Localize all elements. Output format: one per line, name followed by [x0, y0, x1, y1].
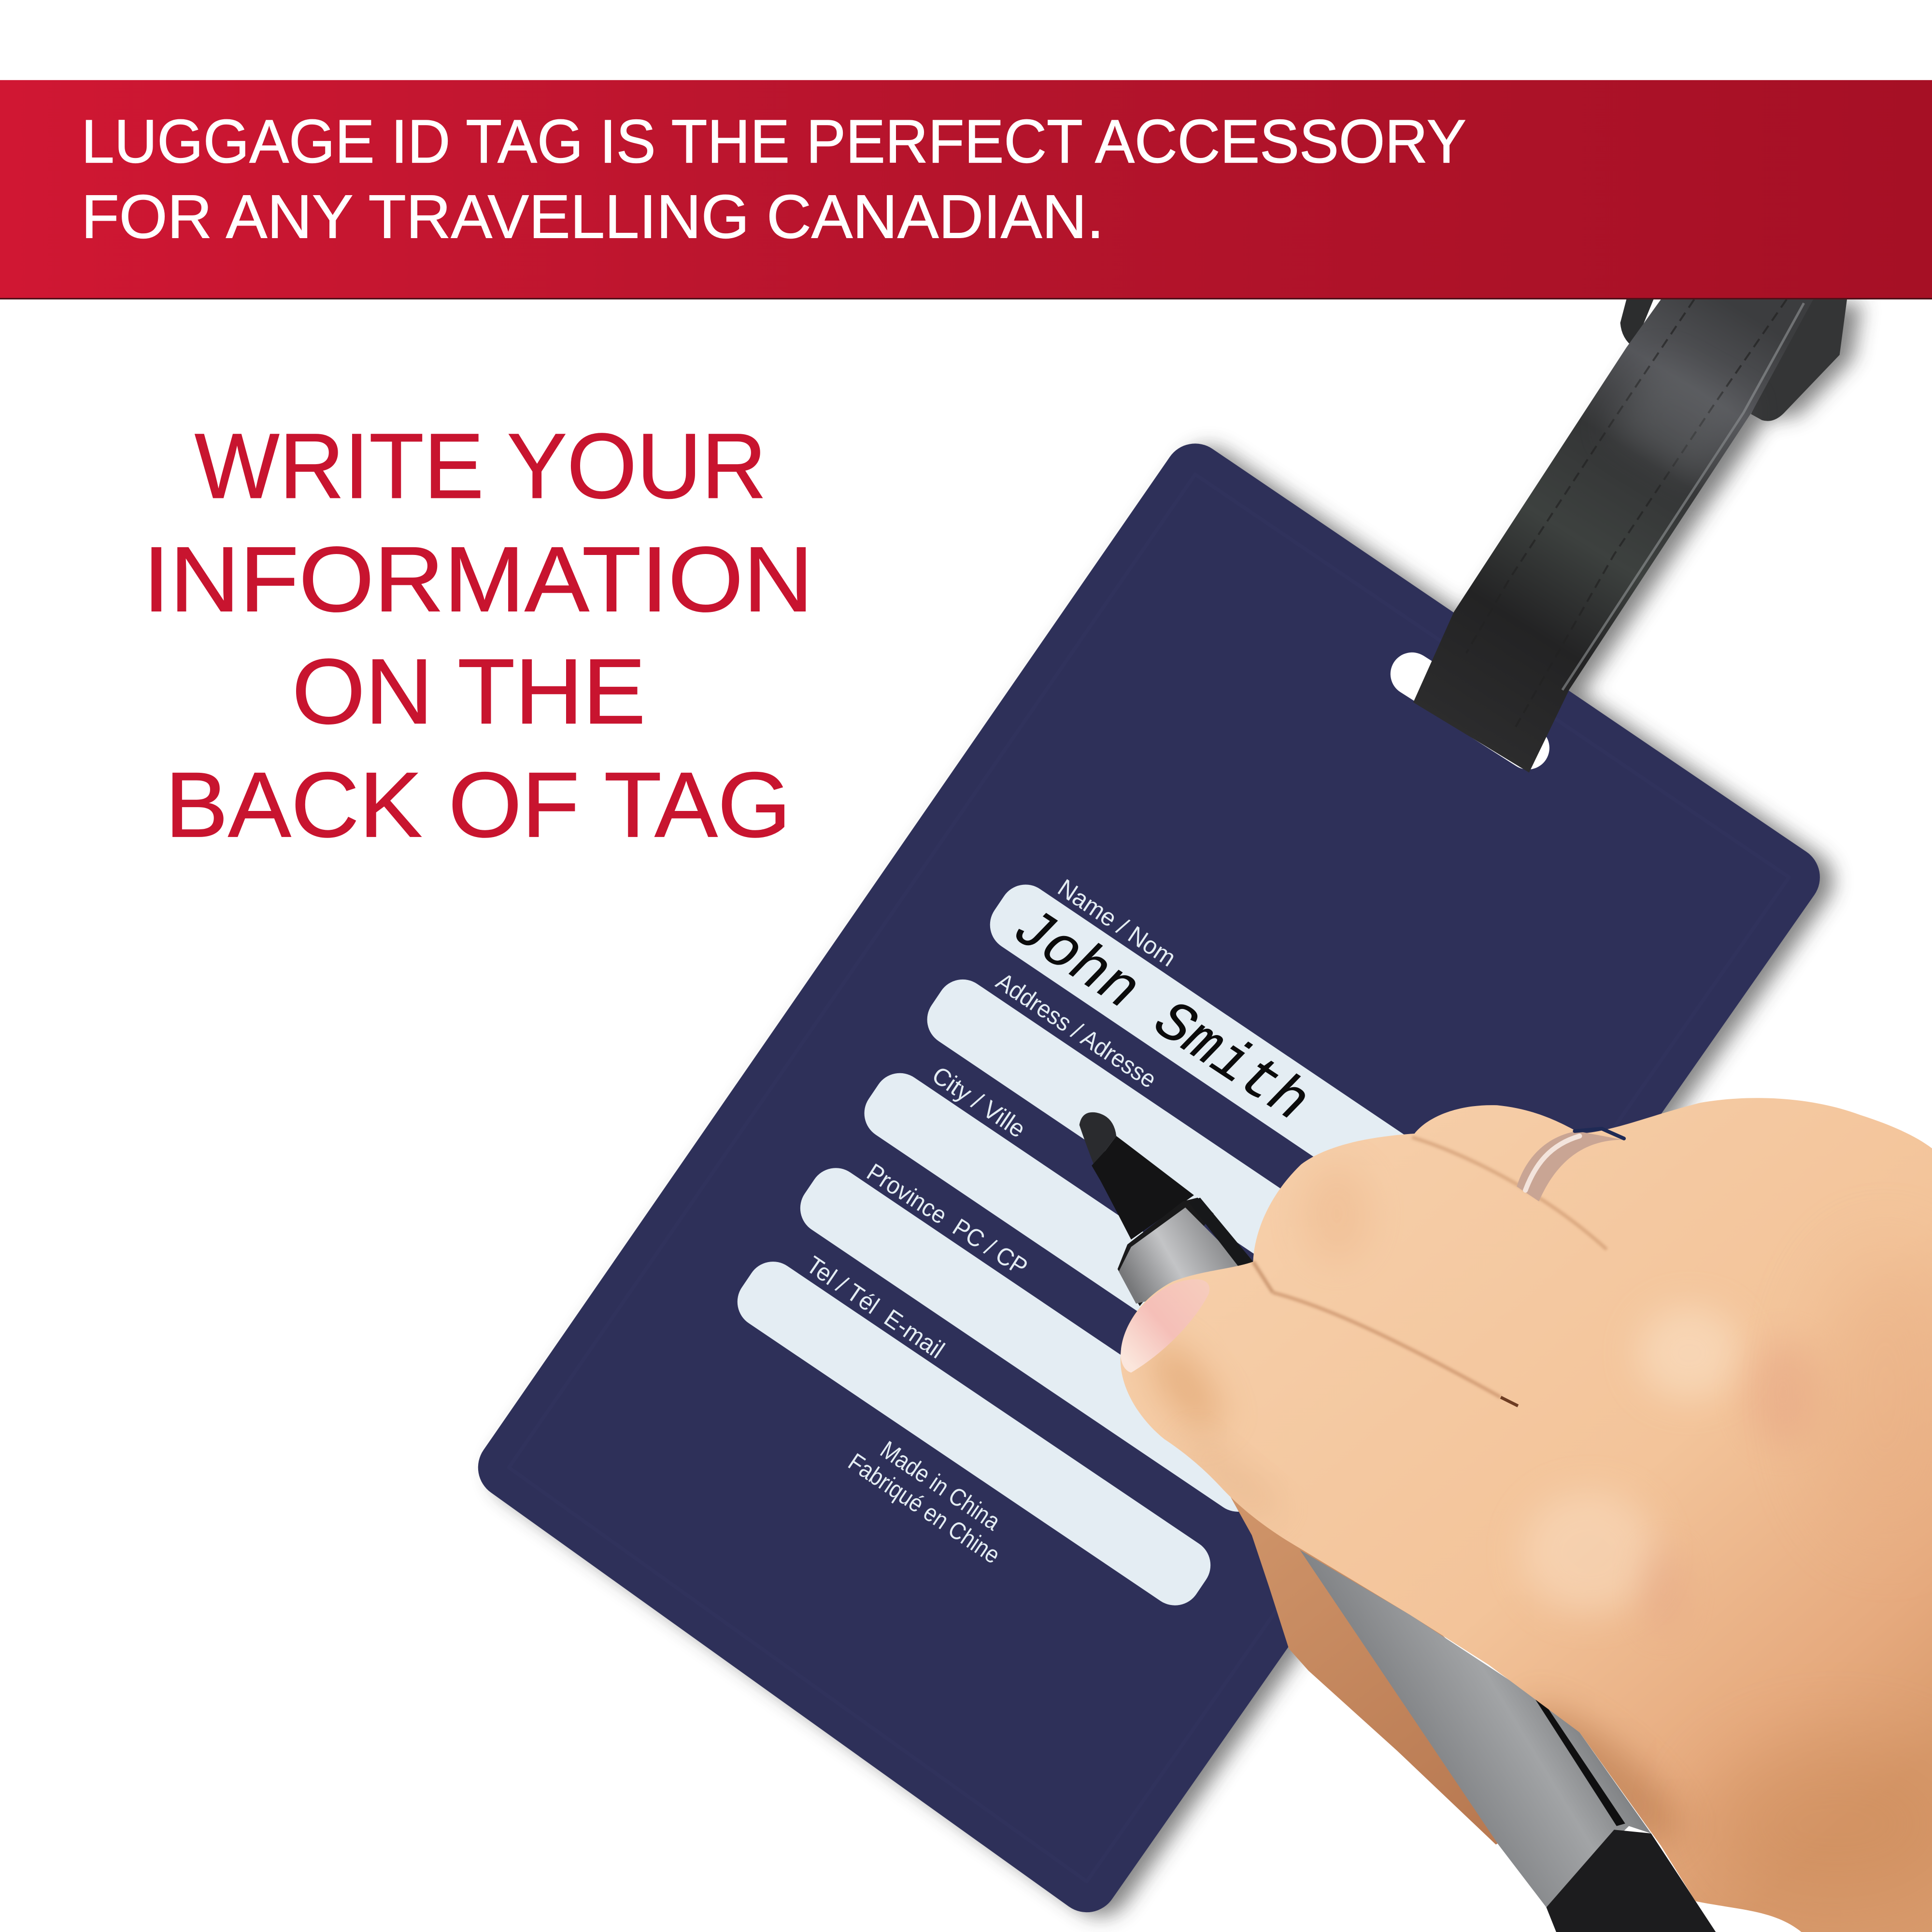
luggage strap — [1413, 299, 1847, 772]
shadow of tag and strap — [523, 303, 1862, 1885]
side heading: WRITE YOUR — [195, 414, 767, 518]
luggage tag body — [509, 474, 1789, 1881]
icon: ring — [1517, 1129, 1624, 1201]
label: Name: Name / Nom — [1053, 874, 1181, 972]
made in china note: Fabriqué en Chine — [843, 1448, 1005, 1569]
made in china note: Made in China — [876, 1435, 1006, 1535]
icon: marker pen barrel — [1300, 1550, 1716, 1932]
thumbnail — [1121, 1279, 1209, 1373]
handwritten name: John Smith — [1000, 895, 1320, 1136]
field: tel — [727, 1251, 1221, 1616]
top banner — [0, 80, 1932, 299]
field: name — [980, 875, 1473, 1238]
strap slot hole — [1412, 674, 1528, 748]
back of palm behind the pen — [1221, 1480, 1602, 1845]
side heading: ON THE — [292, 639, 646, 743]
field: address — [917, 969, 1410, 1333]
label: City: City / Ville — [927, 1061, 1031, 1143]
label: Province: Province PC / CP — [862, 1158, 1033, 1281]
icon: marker pen tip — [1080, 1112, 1259, 1306]
label: Tel: Tel / Tél E-mail — [802, 1251, 950, 1364]
tag raised rim — [509, 474, 1789, 1881]
field: province — [790, 1158, 1283, 1522]
banner heading: FOR ANY TRAVELLING CANADIAN. — [81, 183, 1104, 251]
icon: hand — [1121, 1098, 1932, 1932]
field: city — [854, 1063, 1348, 1427]
label: Address: Address / Adresse — [992, 967, 1162, 1094]
side heading: BACK OF TAG — [165, 753, 791, 856]
banner heading: LUGGAGE ID TAG IS THE PERFECT ACCESSORY — [81, 108, 1466, 176]
side heading: INFORMATION — [143, 527, 813, 631]
